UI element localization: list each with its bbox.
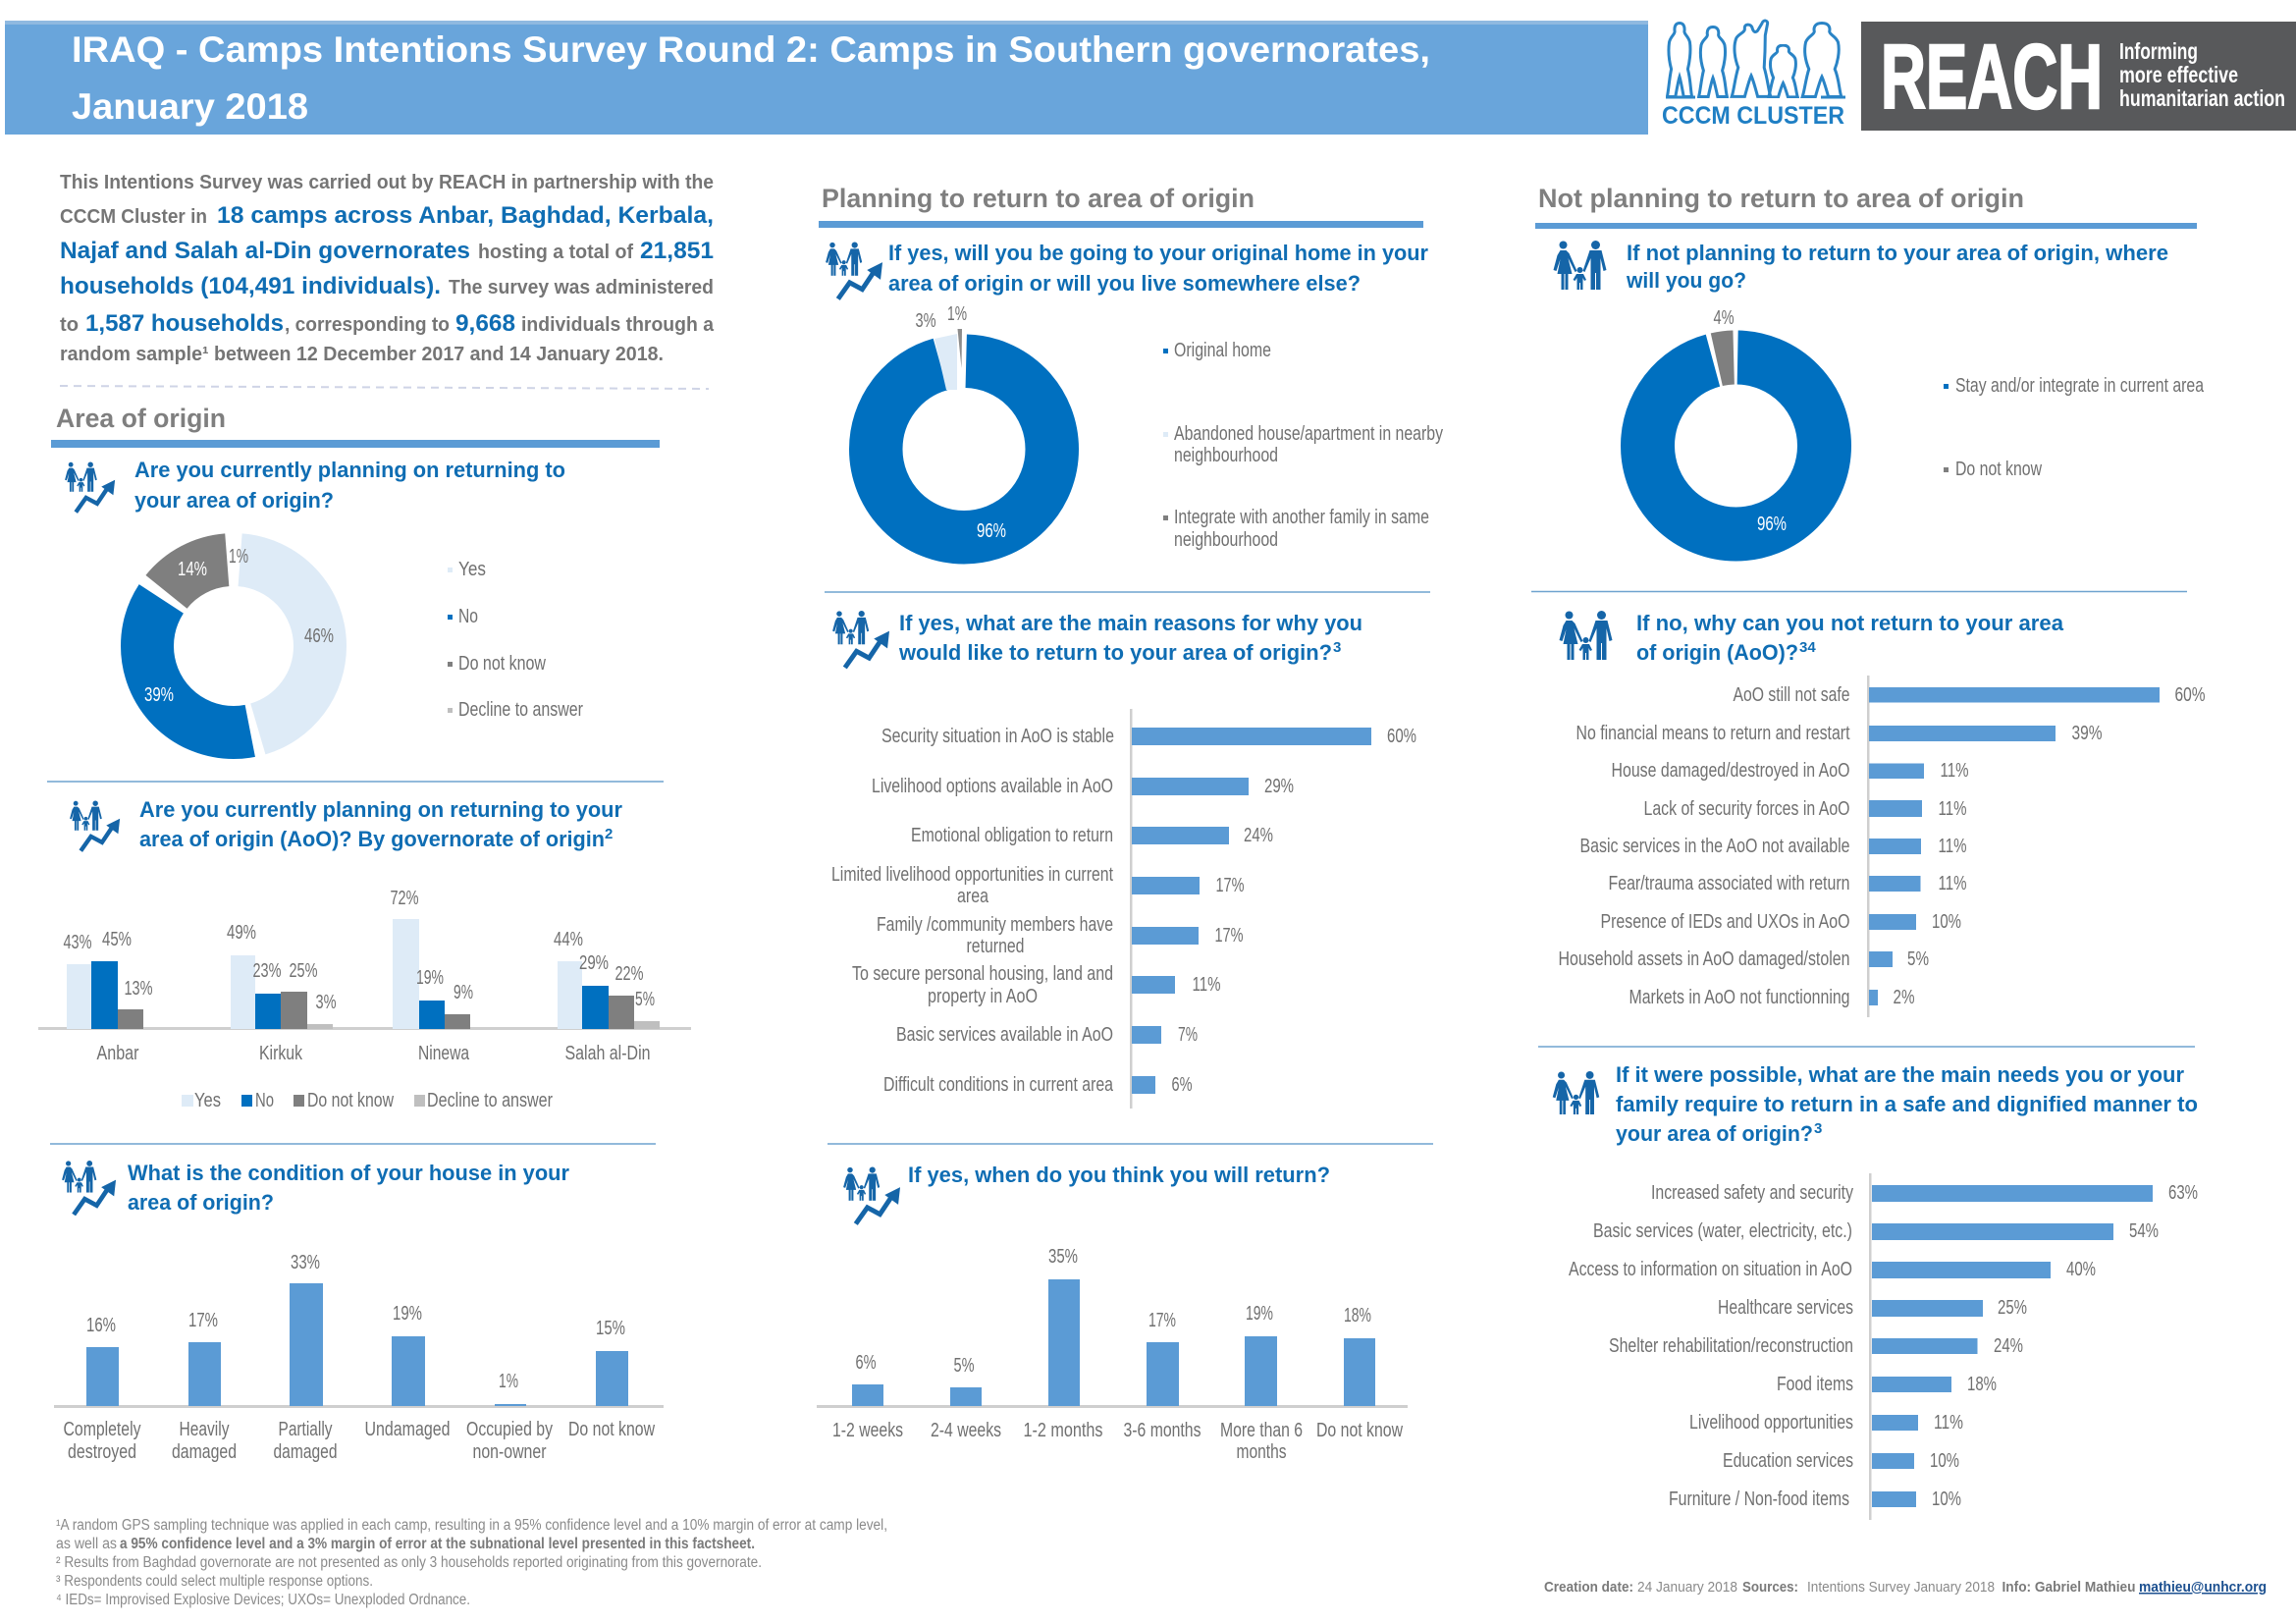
bar chart: why cannot return: Basic services in the AoO not available — [1580, 836, 1849, 857]
panel: main needs to return — [1553, 1062, 2198, 1520]
chart legend — [182, 1090, 553, 1111]
bar chart: return timing: Do not know — [1316, 1420, 1403, 1441]
intro text — [60, 172, 715, 365]
icon: family with rising arrow — [843, 1166, 900, 1224]
footnotes: as well as — [56, 1536, 117, 1552]
donut chart: destination — [876, 303, 1052, 542]
bar chart: main needs: Increased safety and security — [1651, 1182, 1853, 1204]
icon: family — [1553, 1071, 1599, 1114]
bar chart: reasons to return: 29% — [1264, 776, 1294, 797]
intro text: This Intentions Survey was carried out by REACH in partnership with the — [60, 172, 714, 193]
donut legend: Abandoned house/apartment in nearby — [1174, 423, 1443, 445]
bar chart: return timing: 5% — [954, 1355, 975, 1377]
bar chart: why cannot return: Presence of IEDs and UXOs in AoO — [1600, 911, 1849, 933]
title — [72, 29, 1430, 127]
logo: REACH: REACH — [1881, 26, 2103, 128]
bar chart: main needs: Shelter rehabilitation/reconstruction — [1609, 1335, 1853, 1357]
bar chart: why cannot return: AoO still not safe — [1734, 684, 1849, 706]
question: original home — [888, 241, 1428, 296]
bar chart: return timing: months — [1237, 1441, 1286, 1463]
footer credits: mathieu@unhcr.org — [2139, 1579, 2267, 1596]
chart legend: No — [255, 1090, 274, 1111]
grouped bar chart: governorate: 72% — [391, 888, 419, 909]
donut chart: return plans: 39% — [144, 684, 174, 706]
grouped bar chart: governorate: Salah al-Din — [565, 1043, 650, 1064]
donut legend: Do not know — [458, 653, 546, 675]
question: why cannot return: of origin (AoO)? — [1636, 640, 1798, 665]
panel: return timing — [817, 1163, 1408, 1463]
bar chart: why cannot return: 2% — [1893, 987, 1915, 1008]
bar chart: reasons to return: area — [957, 886, 989, 907]
bar chart: reasons to return: 17% — [1215, 875, 1245, 896]
icon: family with rising arrow — [832, 611, 889, 668]
bar chart: main needs: 40% — [2066, 1259, 2096, 1280]
bar chart: main needs: Livelihood opportunities — [1689, 1412, 1853, 1434]
bar chart: reasons to return — [831, 709, 1416, 1109]
question: where will you go: will you go? — [1626, 268, 1746, 293]
logo: REACH: more effective — [2119, 62, 2238, 87]
bar chart: return timing: 35% — [1048, 1246, 1078, 1268]
grouped bar chart: governorate: 19% — [416, 967, 444, 989]
logo: CCCM cluster: CCCM CLUSTER — [1662, 102, 1844, 130]
question: main needs: If it were possible, what are the main needs you or your — [1616, 1062, 2184, 1087]
bar chart: house condition: 17% — [188, 1310, 218, 1331]
grouped bar chart: governorate: Ninewa — [418, 1043, 470, 1064]
panel: house condition — [54, 1161, 664, 1463]
grouped bar chart: governorate: 49% — [227, 922, 256, 944]
bar chart: house condition — [54, 1252, 664, 1463]
grouped bar chart: governorate: 22% — [614, 963, 644, 985]
grouped bar chart: governorate: 9% — [454, 982, 473, 1003]
bar chart: why cannot return: Markets in AoO not functionning — [1629, 987, 1849, 1008]
question: planning on returning — [134, 458, 565, 513]
intro text: households (104,491 individuals). — [60, 273, 441, 299]
bar chart: return timing: 6% — [856, 1352, 877, 1374]
grouped bar chart: governorate: 44% — [554, 929, 583, 950]
footnotes: ³ Respondents could select multiple response options. — [56, 1573, 373, 1590]
grouped bar chart: governorate: Kirkuk — [259, 1043, 303, 1064]
grouped bar chart: governorate: 5% — [635, 989, 655, 1010]
bar chart: main needs: 10% — [1932, 1489, 1961, 1510]
question: where will you go: If not planning to return to your area of origin, where — [1627, 241, 2168, 265]
bar chart: house condition: Undamaged — [365, 1419, 450, 1440]
bar chart: reasons to return: 24% — [1244, 825, 1273, 846]
bar chart: house condition: 15% — [596, 1318, 625, 1339]
question: by governorate — [139, 797, 622, 851]
bar chart: reasons to return: To secure personal housing, land and — [852, 963, 1113, 985]
bar chart: return timing: 17% — [1148, 1310, 1176, 1331]
question: planning on returning: Are you currently planning on returning to — [134, 458, 565, 482]
bar chart: house condition: 1% — [499, 1371, 518, 1392]
bar chart: why cannot return: 11% — [1940, 760, 1969, 782]
bar chart: why cannot return: 11% — [1938, 873, 1967, 894]
bar chart: why cannot return — [1559, 676, 2206, 1017]
icon: family — [1553, 241, 1606, 290]
grouped bar chart: governorate: 3% — [316, 992, 337, 1013]
icon: family with rising arrow — [70, 801, 120, 851]
question: by governorate: Are you currently planning on returning to your — [139, 797, 622, 822]
chart legend: Decline to answer — [427, 1090, 553, 1111]
grouped bar chart: governorate: 25% — [289, 960, 318, 982]
bar chart: reasons to return: 7% — [1178, 1024, 1198, 1046]
donut chart: return plans: 1% — [229, 546, 248, 568]
panel: not planning to return — [1535, 184, 2205, 535]
bar chart: return timing: 19% — [1246, 1303, 1273, 1325]
intro text: The survey was administered — [449, 277, 714, 298]
donut chart: destination: 96% — [977, 520, 1006, 542]
bar chart: return timing — [817, 1246, 1408, 1463]
question: reasons to return: 3 — [1333, 639, 1341, 656]
footer credits: Creation date: — [1544, 1579, 1633, 1596]
bar chart: main needs — [1569, 1173, 2198, 1520]
bar chart: house condition: non-owner — [473, 1441, 547, 1463]
bar chart: why cannot return: Household assets in AoO damaged/stolen — [1559, 948, 1849, 970]
question: where will you go — [1626, 241, 2168, 293]
donut chart: destination: 3% — [915, 310, 936, 332]
question: why cannot return — [1636, 611, 2064, 665]
question: house condition: What is the condition of your house in your — [128, 1161, 569, 1185]
question: reasons to return — [898, 611, 1362, 665]
panel: planning to return — [819, 184, 1443, 551]
donut legend: Original home — [1174, 340, 1271, 361]
intro text: , corresponding to — [285, 314, 450, 336]
donut legend: Do not know — [1955, 459, 2042, 480]
bar chart: why cannot return: No financial means to return and restart — [1576, 723, 1850, 744]
bar chart: reasons to return: Limited livelihood opportunities in current — [831, 864, 1113, 886]
bar chart: house condition: Heavily — [179, 1419, 230, 1440]
intro text: individuals through a — [521, 314, 715, 336]
bar chart: reasons to return: Emotional obligation to return — [911, 825, 1113, 846]
bar chart: why cannot return: 11% — [1938, 798, 1967, 820]
bar chart: house condition: Completely — [63, 1419, 141, 1440]
bar chart: main needs: Food items — [1777, 1374, 1853, 1395]
question: reasons to return: would like to return to your area of origin? — [898, 640, 1332, 665]
intro text: random sample¹ between 12 December 2017 and 14 January 2018. — [60, 344, 664, 365]
question: main needs — [1616, 1062, 2198, 1146]
intro text: hosting a total of — [478, 242, 633, 263]
bar chart: main needs: Furniture / Non-food items — [1669, 1489, 1849, 1510]
bar chart: main needs: Healthcare services — [1718, 1297, 1853, 1319]
bar chart: why cannot return: Lack of security forces in AoO — [1643, 798, 1849, 820]
chart legend: Yes — [194, 1090, 221, 1111]
bar chart: main needs: 10% — [1930, 1450, 1959, 1472]
bar chart: return timing: 2-4 weeks — [931, 1420, 1001, 1441]
icon: family with rising arrow — [65, 461, 115, 513]
question: reasons to return: If yes, what are the main reasons for why you — [899, 611, 1362, 635]
bar chart: house condition: Partially — [279, 1419, 332, 1440]
bar chart: return timing: 3-6 months — [1123, 1420, 1201, 1441]
footnotes: ¹A random GPS sampling technique was applied in each camp, resulting in a 95% confidence level and a 10% margin of error at camp level, — [56, 1517, 887, 1534]
donut legend — [448, 559, 583, 721]
bar chart: house condition: destroyed — [68, 1441, 136, 1463]
intro text: 18 camps across Anbar, Baghdad, Kerbala, — [217, 202, 714, 229]
intro text: to — [60, 314, 79, 336]
bar chart: why cannot return: 11% — [1938, 836, 1967, 857]
donut legend: neighbourhood — [1174, 529, 1278, 551]
grouped bar chart: governorate: 45% — [102, 929, 132, 950]
bar chart: main needs: Education services — [1723, 1450, 1853, 1472]
bar chart: main needs: 25% — [1998, 1297, 2027, 1319]
footer credits: 24 January 2018 — [1637, 1579, 1737, 1596]
donut legend: Stay and/or integrate in current area — [1955, 375, 2205, 397]
bar chart: house condition: Do not know — [568, 1419, 655, 1440]
donut legend — [1163, 340, 1443, 551]
question: original home: If yes, will you be going to your original home in your — [888, 241, 1428, 265]
title: IRAQ - Camps Intentions Survey Round 2: Camps in Southern governorates, — [72, 29, 1430, 70]
question: planning on returning: your area of origin? — [134, 488, 334, 513]
bar chart: house condition: damaged — [172, 1441, 237, 1463]
bar chart: reasons to return: Livelihood options available in AoO — [872, 776, 1113, 797]
bar chart: reasons to return: Security situation in AoO is stable — [881, 726, 1114, 747]
logo: REACH: Informing — [2119, 38, 2198, 64]
bar chart: reasons to return: property in AoO — [928, 986, 1038, 1007]
footnotes: a 95% confidence level and a 3% margin of error at the subnational level presented in this factsheet. — [120, 1536, 755, 1552]
footer credits — [1544, 1579, 2267, 1596]
intro text: CCCM Cluster in — [60, 206, 207, 228]
grouped bar chart: governorate: Anbar — [96, 1043, 139, 1064]
intro text: 9,668 — [455, 310, 515, 337]
bar chart: main needs: 24% — [1994, 1335, 2023, 1357]
bar chart: why cannot return: 39% — [2071, 723, 2103, 744]
bar chart: why cannot return: 10% — [1932, 911, 1961, 933]
logo: REACH — [1861, 22, 2296, 131]
header banner — [5, 21, 1648, 135]
bar chart: reasons to return: 17% — [1215, 925, 1244, 947]
grouped bar chart: governorate: 43% — [63, 932, 92, 953]
bar chart: main needs: Access to information on situation in AoO — [1569, 1259, 1852, 1280]
intro text: 21,851 — [640, 238, 714, 264]
logo: CCCM cluster — [1662, 21, 1845, 130]
bar chart: why cannot return: 60% — [2175, 684, 2206, 706]
icon: family — [1559, 611, 1612, 660]
panel: return plans by governorate — [38, 797, 691, 1111]
section heading: planning to return: Planning to return to area of origin — [822, 184, 1255, 213]
bar chart: return timing: More than 6 — [1220, 1420, 1303, 1441]
panel: reasons to return — [831, 611, 1416, 1109]
bar chart: return timing: 1-2 weeks — [832, 1420, 903, 1441]
question: original home: area of origin or will you live somewhere else? — [888, 271, 1361, 296]
bar chart: reasons to return: 11% — [1192, 974, 1221, 996]
bar chart: reasons to return: 6% — [1172, 1074, 1193, 1096]
bar chart: main needs: 18% — [1967, 1374, 1997, 1395]
chart legend: Do not know — [307, 1090, 394, 1111]
bar chart: house condition: 33% — [291, 1252, 320, 1273]
bar chart: house condition: 19% — [393, 1303, 422, 1325]
question: why cannot return: If no, why can you not return to your area — [1636, 611, 2064, 635]
bar chart: main needs: 63% — [2168, 1182, 2198, 1204]
panel: area of origin — [51, 404, 660, 732]
bar chart: return timing: 18% — [1344, 1305, 1371, 1326]
panel: why cannot return — [1559, 611, 2206, 1017]
icon: family with rising arrow — [826, 242, 882, 299]
donut chart: where will you go: 96% — [1757, 514, 1787, 535]
question: why cannot return: 34 — [1799, 639, 1816, 656]
grouped bar chart: governorate: 23% — [253, 960, 282, 982]
bar chart: reasons to return: returned — [966, 936, 1025, 957]
footnotes: ² Results from Baghdad governorate are not presented as only 3 households reported originating from this governorate. — [56, 1554, 762, 1571]
donut chart: return plans: 46% — [304, 625, 334, 647]
footer credits: Intentions Survey January 2018 — [1807, 1579, 1995, 1596]
donut legend: Integrate with another family in same — [1174, 507, 1429, 528]
donut legend: neighbourhood — [1174, 445, 1278, 466]
question: by governorate: area of origin (AoO)? By governorate of origin — [139, 827, 605, 851]
bar chart: house condition: 16% — [86, 1315, 116, 1336]
bar chart: why cannot return: Fear/trauma associated with return — [1608, 873, 1849, 894]
title: January 2018 — [72, 86, 308, 127]
question: return timing: If yes, when do you think you will return? — [908, 1163, 1330, 1187]
bar chart: why cannot return: 5% — [1907, 948, 1929, 970]
bar chart: reasons to return: Basic services available in AoO — [896, 1024, 1113, 1046]
grouped bar chart: governorate: 13% — [124, 978, 153, 1000]
bar chart: main needs: 11% — [1934, 1412, 1963, 1434]
bar chart: house condition: damaged — [273, 1441, 338, 1463]
icon: family with rising arrow — [62, 1161, 116, 1215]
donut chart: destination: 1% — [947, 303, 967, 325]
footer credits: Info: Gabriel Mathieu — [2002, 1579, 2136, 1596]
question: main needs: 3 — [1814, 1120, 1822, 1137]
donut chart: where will you go — [1647, 307, 1824, 535]
intro text: Najaf and Salah al-Din governorates — [60, 238, 470, 264]
bar chart: reasons to return: 60% — [1387, 726, 1416, 747]
question: house condition: area of origin? — [128, 1190, 274, 1215]
bar chart: reasons to return: Difficult conditions in current area — [883, 1074, 1114, 1096]
donut legend: Decline to answer — [458, 699, 583, 721]
question: by governorate: 2 — [605, 826, 613, 842]
footer credits: Sources: — [1742, 1579, 1798, 1596]
donut chart: return plans: 14% — [178, 559, 207, 580]
bar chart: return timing: 1-2 months — [1023, 1420, 1103, 1441]
donut legend — [1944, 375, 2205, 480]
bar chart: why cannot return: House damaged/destroyed in AoO — [1612, 760, 1849, 782]
bar chart: main needs: Basic services (water, electricity, etc.) — [1593, 1220, 1852, 1242]
intro text: 1,587 households — [85, 310, 284, 337]
question: house condition — [128, 1161, 569, 1215]
footnotes — [56, 1517, 887, 1608]
grouped bar chart: governorate — [38, 888, 691, 1064]
donut chart: where will you go: 4% — [1714, 307, 1735, 329]
bar chart: main needs: 54% — [2129, 1220, 2159, 1242]
donut legend: Yes — [458, 559, 486, 580]
donut legend: No — [458, 606, 478, 627]
section heading: area of origin: Area of origin — [56, 404, 226, 433]
donut chart: return plans — [144, 546, 334, 732]
footnotes: ⁴ IEDs= Improvised Explosive Devices; UXOs= Unexploded Ordnance. — [56, 1592, 470, 1608]
question: main needs: your area of origin? — [1616, 1121, 1813, 1146]
bar chart: house condition: Occupied by — [466, 1419, 553, 1440]
section heading: not planning to return: Not planning to return to area of origin — [1538, 184, 2024, 213]
bar chart: reasons to return: Family /community members have — [877, 914, 1113, 936]
grouped bar chart: governorate: 29% — [579, 952, 609, 974]
question: main needs: family require to return in a safe and dignified manner to — [1616, 1092, 2198, 1116]
